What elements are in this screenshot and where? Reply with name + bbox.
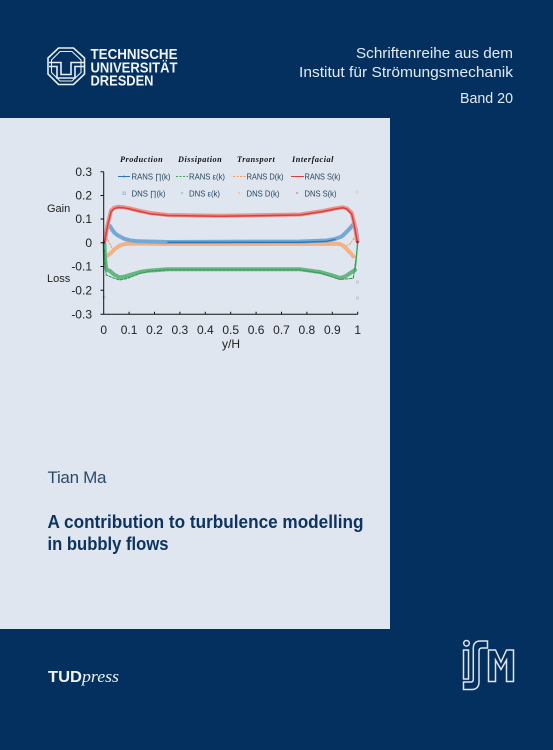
logo: ISM institute [464,640,514,690]
logo wordmark: UNIVERSITÄT [90,60,178,76]
series: end-wall drop [355,243,358,270]
legend column headings [120,155,334,164]
series: DNS interfacial [105,207,357,241]
logo wordmark: TECHNISCHE [90,46,178,63]
x axis labels: 0.9 [324,323,341,337]
gain and loss labels [47,203,71,285]
x axis labels: 0.1 [121,323,138,337]
x axis labels: 0.7 [273,323,290,337]
series title: Schriftenreihe aus dem [356,45,513,62]
book title [48,512,364,554]
letter S [464,641,488,690]
legend: DNS S(k) [304,190,337,198]
author name: Tian Ma [48,468,107,487]
x axis labels: 0.2 [146,323,163,337]
y axis labels [71,165,92,322]
series: RANS production [168,240,335,242]
y axis labels: 0 [85,236,92,250]
x axis labels: 0.5 [222,323,239,337]
letter I [464,650,468,679]
x axis labels: 0.8 [299,323,316,337]
data series [104,207,358,280]
legend: RANS ∏(k) [132,172,171,182]
legend [118,172,341,198]
x axis labels: 0 [100,323,107,337]
stray edge data points [103,191,359,299]
legend: RANS S(k) [304,172,341,182]
x axis labels: 0.4 [197,323,214,337]
series: RANS transport dotted [104,238,358,252]
series: DNS dissipation [104,244,355,278]
logo: TU Dresden [48,46,178,90]
logo wordmark: DRESDEN [90,72,154,90]
legend: RANS D(k) [246,172,284,182]
legend: DNS ε(k) [189,190,220,198]
y axis labels: 0.3 [75,165,92,179]
line chart: turbulence budget [47,155,361,351]
i dot [464,640,469,646]
panel: light cover panel [0,118,390,629]
logo wordmark [90,46,178,90]
series: DNS transport [106,244,354,256]
legend column headings: Interfacial [291,155,334,164]
legend column headings: Production [120,155,163,164]
icon: TU octagon emblem [48,48,84,84]
publisher logo: TUDpress: TUD [48,669,82,686]
legend: DNS ∏(k) [132,190,166,198]
x axis title: y/H [222,337,240,351]
book title: A contribution to turbulence modelling [48,512,364,532]
legend: DNS D(k) [246,190,280,198]
x axis labels [100,323,361,337]
book title: in bubbly flows [48,534,168,554]
x axis labels: 1 [354,323,361,337]
x axis labels: 0.3 [172,323,189,337]
x axis labels: 0.6 [248,323,265,337]
series: RANS dissipation [104,243,358,280]
y axis labels: -0.1 [71,260,92,274]
series title: Band 20 [460,90,513,107]
legend column headings: Transport [237,155,275,164]
y axis labels: -0.3 [71,308,92,322]
legend: RANS ε(k) [189,172,225,182]
legend column headings: Dissipation [177,155,222,164]
gain and loss labels: Gain [47,203,70,215]
series: DNS production [105,224,358,242]
publisher logo: TUDpress: press [81,667,119,686]
y axis labels: 0.2 [75,188,92,202]
series title [299,45,514,107]
gain and loss labels: Loss [47,273,71,285]
series title: Institut für Strömungsmechanik [299,64,514,81]
series: RANS interfacial [105,208,357,242]
axes [100,172,358,314]
y axis labels: 0.1 [75,212,92,226]
letter M [488,650,514,682]
y axis labels: -0.2 [71,284,92,298]
publisher logo: TUDpress [48,667,119,686]
